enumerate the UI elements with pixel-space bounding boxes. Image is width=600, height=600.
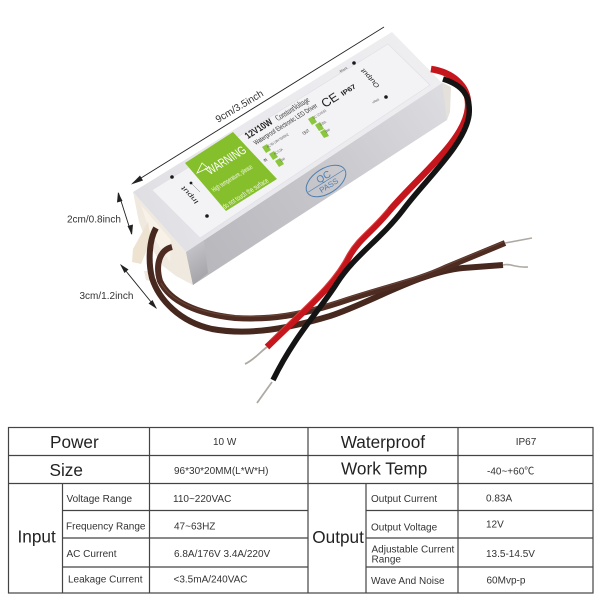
voltage range value: 110~220VAC <box>173 494 231 505</box>
output spec block: 0.83A <box>319 120 328 127</box>
black wire <box>257 79 469 403</box>
warning line 2: do not touch the surface <box>221 177 271 211</box>
input terminals <box>170 175 209 218</box>
IP67 mark: IP67 <box>340 83 358 98</box>
size value: 96*30*20MM(L*W*H) <box>174 466 268 477</box>
frequency range value: 47~63HZ <box>174 522 215 532</box>
input spec block <box>262 132 290 167</box>
end cap recess <box>141 205 171 262</box>
dimension: wire 3cm/1.2inch <box>80 264 157 309</box>
warning line 1: High temperature, please <box>211 164 255 194</box>
model 12V10W: 12V10W <box>242 116 275 141</box>
dimension: wire 3cm/1.2inch: 3cm/1.2inch <box>80 291 133 302</box>
dimension: width 2cm/0.8inch: 2cm/0.8inch <box>67 214 121 226</box>
side face <box>186 83 447 285</box>
heading: input: Input <box>18 527 56 547</box>
top face inset panel <box>152 44 430 238</box>
dimension: width 2cm/0.8inch <box>67 192 133 235</box>
CE mark: CE <box>318 90 342 110</box>
brown wire A strand <box>503 265 528 267</box>
QC PASS stamp: PASS <box>318 176 340 195</box>
output spec block <box>301 109 331 138</box>
output current value: 0.83A <box>486 493 512 504</box>
brown wire B <box>158 243 505 318</box>
row: waterproof: Waterproof <box>341 432 425 452</box>
output voltage: Output Voltage <box>371 523 438 534</box>
row: size: Size <box>50 460 83 480</box>
work temp value: -40~+60℃ <box>487 467 534 478</box>
output voltage value: 12V <box>486 519 504 530</box>
wave and noise: Wave And Noise <box>371 576 445 587</box>
QC PASS stamp: QC <box>315 169 333 186</box>
brown wire highlight <box>161 242 503 316</box>
black wire strand <box>257 382 272 403</box>
QC PASS stamp <box>301 159 351 203</box>
input spec block: AC 0.3A <box>273 147 285 156</box>
heading: output: Output <box>312 527 364 547</box>
input terminals: Input <box>180 185 201 205</box>
input spec block: IN <box>262 157 269 163</box>
warning triangle icon <box>197 163 208 173</box>
output terminals: -Black <box>338 66 349 74</box>
frequency range: Frequency Range <box>66 522 146 532</box>
end cap plastic <box>133 192 193 285</box>
product description: Waterproof Electronic LED Driver <box>253 103 320 147</box>
output spec block: OUT <box>301 128 311 136</box>
red wire <box>245 69 468 364</box>
dimension: length 9cm/3.5inch: 9cm/3.5inch <box>214 88 266 126</box>
AC current: AC Current <box>66 549 117 560</box>
output terminals: +Red <box>371 98 380 105</box>
adjustable current range value: 13.5-14.5V <box>486 549 535 560</box>
AC current value: 6.8A/176V 3.4A/220V <box>174 549 271 560</box>
output spec block: DC 12V/0.83 <box>312 109 328 120</box>
row: power: Power <box>50 432 99 452</box>
leakage current: Leakage Current <box>68 575 143 586</box>
specification table <box>8 428 593 593</box>
red wire highlight <box>270 208 388 340</box>
side face near strip <box>186 240 208 285</box>
waterproof value: IP67 <box>516 437 537 448</box>
far end tab <box>441 82 451 120</box>
leakage current value: <3.5mA/240VAC <box>174 575 248 586</box>
green warning label <box>185 132 277 211</box>
top face <box>133 32 442 252</box>
mounting tab upper <box>132 222 151 264</box>
brand ConstantVoltage: ConstantVoltage <box>273 95 312 123</box>
row: work temp: Work Temp <box>341 458 427 478</box>
table grid <box>8 428 593 593</box>
adjustable current range: Adjustable Current <box>372 545 455 556</box>
mounting tab lower <box>144 271 150 281</box>
brown wire B strand <box>505 238 532 243</box>
power value: 10 W <box>213 437 237 448</box>
device: waterproof LED driver <box>132 32 451 285</box>
adjustable current range: Range <box>372 554 401 566</box>
input spec block: 12W <box>279 157 286 163</box>
input spec block: AC 90-130V 50/60HZ <box>266 132 290 149</box>
output terminals <box>338 61 388 105</box>
output terminals: Output <box>359 67 382 89</box>
dimension: length 9cm/3.5inch <box>131 27 384 184</box>
output current: Output Current <box>371 494 437 505</box>
wave and noise value: 60Mvp-p <box>486 576 526 587</box>
WARNING text: WARNING <box>204 144 250 178</box>
red wire strand <box>245 347 267 364</box>
voltage range: Voltage Range <box>66 494 133 505</box>
output spec block: 10W <box>324 128 331 134</box>
brown wire A <box>150 228 503 332</box>
brown wires <box>150 228 532 332</box>
